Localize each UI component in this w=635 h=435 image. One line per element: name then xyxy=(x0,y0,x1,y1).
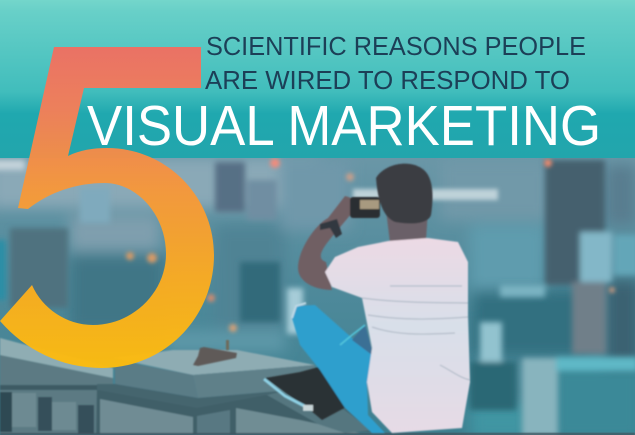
head xyxy=(376,164,433,224)
man photographing the city xyxy=(264,164,470,433)
object on ledge xyxy=(193,340,237,366)
left shoe xyxy=(264,366,350,420)
concrete ledge xyxy=(0,338,635,435)
neck xyxy=(386,210,428,243)
numeral 5 xyxy=(0,47,214,368)
heading line 1: SCIENTIFIC REASONS PEOPLE xyxy=(206,31,586,61)
watch xyxy=(320,219,342,238)
phone xyxy=(350,197,380,218)
shirt folds xyxy=(362,286,470,380)
jeans xyxy=(292,303,385,433)
heading line 2: ARE WIRED TO RESPOND TO xyxy=(205,65,570,95)
main title: VISUAL MARKETING xyxy=(87,94,601,158)
teal title band xyxy=(0,0,635,158)
arm and hand xyxy=(298,196,355,290)
t-shirt xyxy=(325,238,470,433)
